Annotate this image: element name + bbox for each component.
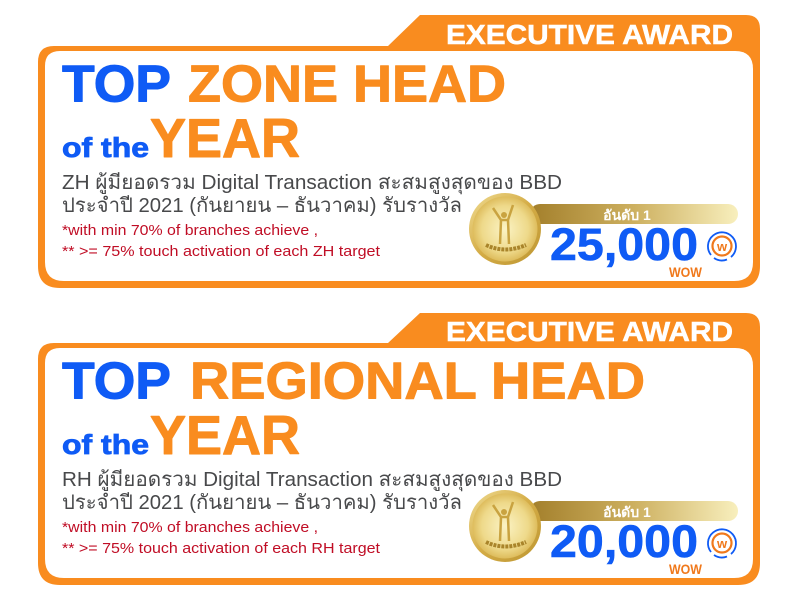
icon: wow coin: w: [716, 239, 728, 254]
wow unit: WOW: [669, 561, 703, 577]
heading: of the year: [62, 404, 300, 466]
rank label: อันดับ 1: [603, 207, 651, 223]
prize amount: 25,000: [550, 219, 698, 270]
panel: top zone head award: [38, 15, 760, 288]
icon: wow coin: [708, 232, 736, 260]
icon: wow coin: [708, 529, 736, 557]
prize amount: 20,000: [550, 516, 698, 567]
heading: top regional head: TOP: [62, 352, 171, 410]
description: ประจำปี 2021 (กันยายน – ธันวาคม) รับรางวัล: [62, 195, 462, 217]
conditions note: ** >= 75% touch activation of each ZH target: [62, 243, 381, 260]
description: [62, 469, 562, 514]
rank bar: [530, 501, 738, 521]
icon: gold medal: [469, 490, 541, 562]
card white interior: [45, 348, 753, 578]
tab label: EXECUTIVE AWARD: [446, 19, 733, 50]
panel: top regional head award: [38, 313, 760, 585]
rank bar: [530, 204, 738, 224]
conditions note: [62, 519, 381, 557]
heading: of the year: of the: [62, 429, 149, 460]
description: ZH ผู้มียอดรวม Digital Transaction สะสมสูงสุดของ BBD: [62, 172, 562, 195]
conditions note: *with min 70% of branches achieve ,: [62, 222, 318, 239]
card frame with executive award tab: [38, 313, 760, 585]
icon: wow coin: w: [716, 536, 728, 551]
heading: top regional head: REGIONAL HEAD: [190, 352, 645, 410]
heading: of the year: YEAR: [150, 107, 300, 169]
description: ประจำปี 2021 (กันยายน – ธันวาคม) รับรางวัล: [62, 492, 462, 514]
conditions note: *with min 70% of branches achieve ,: [62, 519, 318, 536]
tab label: EXECUTIVE AWARD: [446, 316, 733, 347]
description: RH ผู้มียอดรวม Digital Transaction สะสมสูงสุดของ BBD: [62, 469, 562, 492]
heading: top zone head: ZONE HEAD: [188, 56, 506, 114]
description: [62, 172, 562, 217]
conditions note: [62, 222, 381, 260]
heading: of the year: of the: [62, 132, 149, 163]
card white interior: [45, 51, 753, 281]
card frame with executive award tab: [38, 15, 760, 288]
heading: top zone head: TOP: [62, 56, 171, 114]
heading: top zone head: [62, 56, 506, 114]
icon: gold medal: [469, 193, 541, 265]
wow unit: WOW: [669, 264, 703, 280]
heading: of the year: YEAR: [150, 404, 300, 466]
rank label: อันดับ 1: [603, 504, 651, 520]
heading: of the year: [62, 107, 300, 169]
conditions note: ** >= 75% touch activation of each RH target: [62, 540, 381, 557]
